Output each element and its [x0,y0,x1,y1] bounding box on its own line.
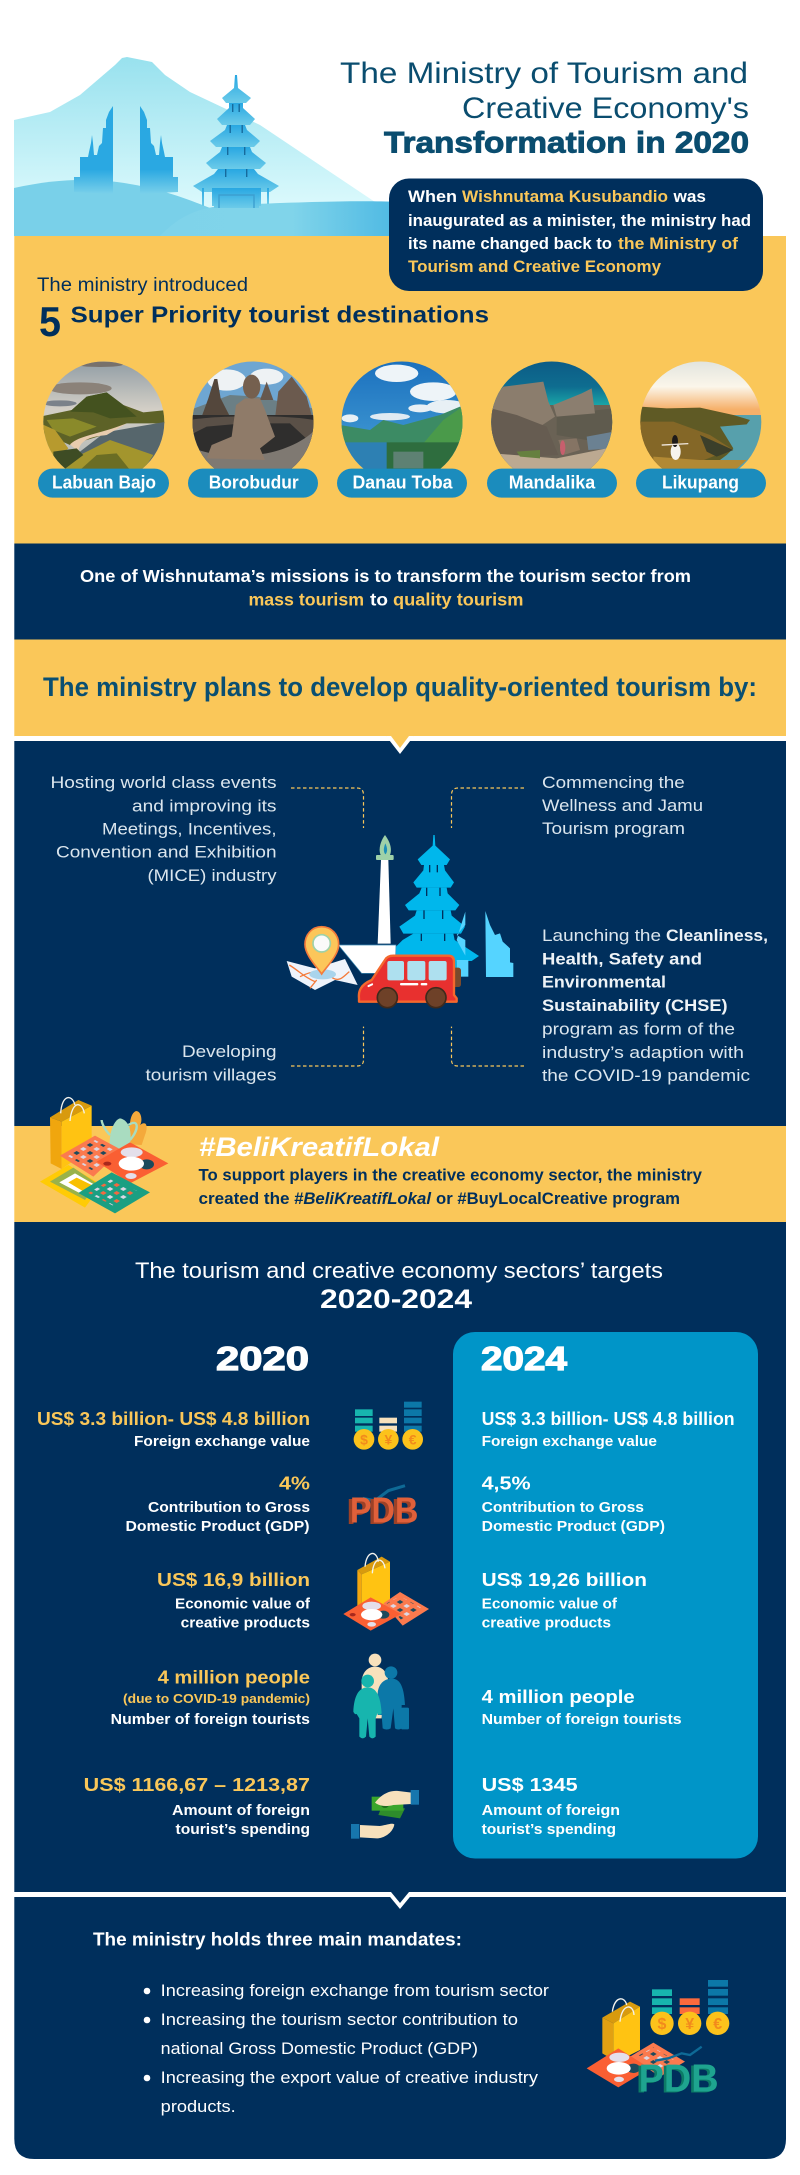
photo: Borobudur [190,358,317,472]
heading: targets 2020-2024: 2020-2024 [320,1284,472,1314]
text: CHSE program: industry’s adaption with [542,1043,744,1062]
list: mandates: products. [161,2097,236,2116]
text: developing tourism villages: Developing [182,1042,276,1061]
column: 2020 targets: 2020 [216,1340,309,1377]
list: mandates [144,1981,549,2116]
national monument [338,835,396,973]
heading: 5 Super Priority tourist destinations: The ministry introduced [37,274,248,296]
text: CHSE program [542,926,768,1085]
title [340,57,749,160]
heading: targets 2020-2024 [135,1258,663,1314]
icon: currency coin stacks: € [409,1431,417,1447]
column: 2020 targets: 4 million people [158,1668,310,1688]
text: developing tourism villages: tourism villages [146,1066,276,1084]
title: The Ministry of Tourism and [340,57,748,90]
icon: PDB chart: PDB [347,1491,415,1532]
heading: 5 Super Priority tourist destinations [37,274,489,345]
label pills: destination names: Mandalika [509,472,596,492]
panel: 2024 targets [453,1332,758,1858]
list: mandates: national Gross Domestic Product (GDP) [161,2039,478,2058]
icon: group of tourists [353,1654,409,1738]
title: Creative Economy's [462,92,749,125]
pagoda [387,835,479,977]
photo: Likupang [640,358,763,472]
column: 2020 targets [37,1340,310,1838]
label pills: destination names [38,469,766,498]
text: hosting world class events: (MICE) industry [148,866,277,885]
callout: Wishnutama inauguration: the Ministry of [618,235,739,253]
heading: targets 2020-2024: The tourism and creative economy sectors’ targets [135,1258,663,1283]
photo: Mandalika [490,358,613,472]
panel: mission statement band: One of Wishnutama’s missions is to transform the tourism sector from [80,566,691,586]
panel: mission statement band: to [370,590,388,610]
icon: central tourism illustration [287,835,513,1008]
text: hosting world class events [50,773,277,885]
icon: currency coin stacks: $ [360,1431,368,1447]
panel: yellow destinations background [14,236,786,544]
label pills: destination names: Likupang [662,472,739,492]
list: mandates: Increasing foreign exchange from tourism sector [161,1981,549,2000]
text: developing tourism villages [146,1042,276,1084]
text: hosting world class events: Hosting world class events [50,773,276,792]
panel: plans heading band [14,640,786,736]
panel: 2024 targets: US$ 3.3 billion- US$ 4.8 billion [482,1409,735,1429]
label pills: destination names: Labuan Bajo [52,472,156,492]
panel: 2024 targets: Contribution to Gross [482,1500,644,1516]
map [287,959,358,990]
panel: BeliKreatifLokal band: created the [198,1189,290,1208]
icon: shopping bag, teapot and batik mats [40,1098,168,1213]
text: hosting world class events: Convention and Exhibition [56,842,276,862]
panel: BeliKreatifLokal band [14,1126,786,1222]
column: 2020 targets: Number of foreign tourists [111,1712,310,1728]
callout: Wishnutama inauguration: inaugurated as a minister, the ministry had [408,212,751,230]
list: mandates: Increasing the tourism sector contribution to [161,2010,518,2029]
heading: 5 Super Priority tourist destinations: 5 [39,298,61,345]
text: CHSE program: Launching the [542,926,661,945]
panel: 2024 targets: Amount of foreign [482,1803,620,1819]
gate silhouette [485,911,513,977]
text: wellness and jamu tourism: Commencing the [542,773,685,792]
text: CHSE program: program as form of the [542,1020,735,1038]
panel: 2024 targets: creative products [482,1616,611,1632]
text: CHSE program: Health, Safety and [542,950,702,968]
icon: mandates collage: € [713,2016,722,2033]
panel: 2024 targets: Domestic Product (GDP) [482,1519,665,1535]
panel: 2024 targets: 4 million people [482,1687,635,1707]
text: wellness and jamu tourism [542,773,703,838]
panel: three main mandates [14,1892,786,2159]
panel: mission statement band: quality tourism [393,590,524,610]
icon: hands exchanging money [351,1790,419,1839]
panel: BeliKreatifLokal band: #BeliKreatifLokal [294,1189,432,1208]
chevron arrow [386,736,414,754]
label pills: destination names: Borobudur [209,472,299,492]
column: 2020 targets: Economic value of [175,1596,310,1612]
text: CHSE program: the COVID-19 pandemic [542,1066,751,1085]
map pin [305,927,339,974]
panel: header illustration of Bali mountain and temples [14,57,400,236]
icon: mandates collage: PDB [636,2058,716,2102]
panel: BeliKreatifLokal band: #BeliKreatifLokal [199,1132,440,1162]
panel: mission statement band: mass tourism [248,590,364,610]
icon: shopping bag and mats [343,1553,429,1631]
column: 2020 targets: 4% [279,1474,310,1494]
chevron arrow [386,1892,414,1909]
red car [359,956,461,1008]
column: 2020 targets: (due to COVID-19 pandemic) [123,1691,310,1706]
panel: 2024 targets: Foreign exchange value [482,1434,657,1450]
icon: mandates collage: PDB [639,2056,719,2100]
panel: 2024 targets: 4,5% [482,1474,531,1494]
panel: 2024 targets: US$ 19,26 billion [482,1570,647,1590]
column: 2020 targets: Foreign exchange value [134,1434,310,1450]
text: hosting world class events: Meetings, Incentives, [102,820,276,838]
callout: Wishnutama inauguration: was [672,188,706,206]
text: mandates heading: The ministry holds three main mandates: [93,1930,462,1950]
panel: BeliKreatifLokal band: To support players in the creative economy sector, the ministry [198,1166,703,1185]
column: 2020 targets: Contribution to Gross [148,1500,310,1516]
icon: mandates collage: ¥ [685,2016,694,2033]
photo: Labuan Bajo [43,362,164,469]
callout: Wishnutama inauguration: its name changed back to [408,235,612,253]
panel: quality tourism plans [14,736,786,1126]
column: 2020 targets: Domestic Product (GDP) [126,1519,310,1535]
icon: currency coin stacks [354,1402,423,1450]
callout: Wishnutama inauguration [389,178,763,291]
callout: Wishnutama inauguration: When [408,188,457,206]
column: 2020 targets: tourist’s spending [176,1822,310,1838]
column: 2020 targets: US$ 1166,67 – 1213,87 [84,1775,310,1795]
panel: 2024 targets: Economic value of [482,1596,617,1612]
text: CHSE program: Environmental [542,972,666,992]
second gate half [457,912,468,977]
icon: mandates collage [587,1980,729,2102]
label pills: destination names: Danau Toba [352,472,453,492]
text: hosting world class events: and improving its [132,796,276,816]
panel: 2024 targets: 2024 [481,1340,568,1377]
heading: 5 Super Priority tourist destinations: Super Priority tourist destinations [70,302,489,328]
panel: 2024 targets: Number of foreign tourists [482,1712,682,1728]
icon: mandates collage: $ [658,2016,667,2033]
icon: PDB chart: PDB [350,1490,418,1531]
text: CHSE program: Sustainability (CHSE) [542,996,728,1015]
panel: mission statement band [14,544,786,640]
column: 2020 targets: Amount of foreign [172,1803,310,1819]
panel: 2024 targets: US$ 1345 [482,1775,578,1795]
panel: 2024 targets: tourist’s spending [482,1822,616,1838]
panel: targets background [14,1222,786,1892]
text: wellness and jamu tourism: Tourism program [542,819,685,838]
callout: Wishnutama inauguration: Tourism and Creative Economy [408,258,662,276]
text: CHSE program: Cleanliness, [666,926,768,945]
column: 2020 targets: creative products [181,1616,310,1632]
text: wellness and jamu tourism: Wellness and Jamu [542,796,703,815]
panel: BeliKreatifLokal band: or #BuyLocalCreative program [436,1189,680,1208]
callout: Wishnutama inauguration: Wishnutama Kusubandio [462,188,668,206]
photo: Danau Toba [340,358,467,472]
column: 2020 targets: US$ 3.3 billion- US$ 4.8 billion [37,1409,310,1429]
list: mandates: Increasing the export value of creative industry [161,2068,539,2087]
icon: currency coin stacks: ¥ [384,1431,392,1447]
panel: plans heading band: The ministry plans to develop quality-oriented tourism by: [43,672,757,702]
column: 2020 targets: US$ 16,9 billion [157,1570,310,1590]
title: Transformation in 2020 [384,126,749,160]
